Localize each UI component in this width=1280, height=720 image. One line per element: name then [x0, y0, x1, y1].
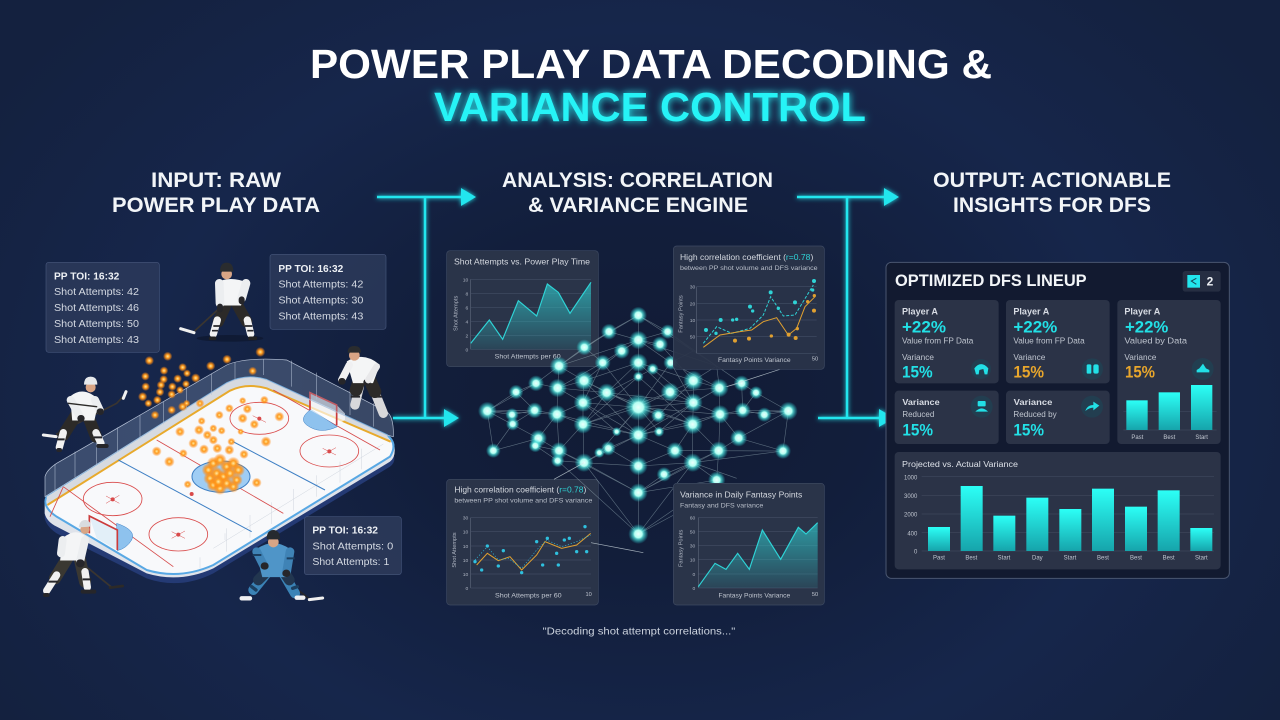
stat card: top right: Shot Attempts: 30 — [278, 296, 364, 307]
mini bars: Past — [1131, 435, 1144, 441]
chart panel: high correlation upper: between PP shot volume and DFS variance — [680, 265, 818, 272]
title: POWER PLAY DATA DECODING & — [310, 41, 992, 87]
card: player 1: +22% — [902, 317, 946, 336]
title — [310, 41, 992, 130]
player: bottom left — [45, 520, 123, 595]
icon — [971, 359, 991, 379]
player: bottom centre — [242, 530, 323, 600]
bar chart: projected vs actual variance: 0 — [914, 549, 918, 555]
heading: analysis: ANALYSIS: CORRELATION — [502, 169, 773, 192]
stat card: bottom right: Shot Attempts: 0 — [312, 541, 394, 552]
badge — [1183, 271, 1221, 292]
goal crease left — [117, 523, 133, 551]
bar chart: projected vs actual variance — [895, 452, 1221, 569]
chart panel: high correlation lower: High correlation coefficient (r=0.78) — [454, 485, 587, 495]
neural network — [478, 307, 798, 553]
card: player 1: Value from FP Data — [902, 336, 974, 346]
output dashboard — [886, 262, 1229, 578]
chart panel: variance in daily fantasy points: 0 — [693, 572, 696, 578]
stat card: top left: Shot Attempts: 43 — [54, 335, 139, 346]
badge: 2 — [1207, 275, 1214, 289]
chart panel: high correlation lower: 10 — [463, 530, 469, 536]
chart panel: shot attempts vs power play time: 0 — [466, 347, 469, 353]
stat card: bottom right: Shot Attempts: 1 — [312, 557, 390, 568]
rink markings — [50, 390, 380, 567]
card: player 2: Value from FP Data — [1013, 336, 1085, 346]
bar chart: projected vs actual variance: Past — [933, 556, 945, 562]
card: variance reduced 1: 15% — [902, 420, 933, 439]
bar chart: projected vs actual variance: 3000 — [904, 494, 918, 500]
stat card: top right: Shot Attempts: 42 — [278, 280, 364, 291]
bar chart: projected vs actual variance: Best — [965, 556, 978, 562]
player: left — [43, 377, 127, 450]
heading: analysis: & VARIANCE ENGINE — [528, 194, 748, 217]
rink glass — [45, 359, 393, 497]
bar chart: projected vs actual variance: Start — [1064, 556, 1077, 562]
card: player 3 with bars: Player A — [1124, 306, 1161, 316]
chart panel: high correlation lower — [447, 479, 598, 605]
heading: output — [933, 169, 1171, 217]
player: top right — [342, 346, 383, 413]
heading: output: INSIGHTS FOR DFS — [953, 194, 1151, 217]
chart panel: high correlation upper: 50 — [812, 357, 818, 363]
chart panel: variance in daily fantasy points: 50 — [690, 530, 696, 536]
stat card: top right: Shot Attempts: 43 — [278, 312, 364, 323]
chart panel: variance in daily fantasy points: Variance in Daily Fantasy Points — [680, 489, 802, 499]
icon — [1192, 358, 1214, 380]
card: player 2: +22% — [1013, 317, 1058, 336]
card: player 3 with bars: Variance — [1124, 352, 1157, 362]
card: variance reduced 2: Variance — [1014, 397, 1053, 407]
arrow: input to analysis — [377, 188, 476, 427]
stat card: top left: PP TOI: 16:32 — [54, 271, 120, 282]
heading: input: POWER PLAY DATA — [112, 194, 320, 217]
stat card: top left — [46, 262, 159, 352]
analysis engine — [447, 246, 824, 638]
chart panel: shot attempts vs power play time — [447, 251, 598, 367]
card: player 2: Player A — [1013, 306, 1050, 316]
bar chart: projected vs actual variance: Projected vs. Actual Variance — [902, 459, 1018, 469]
chart panel: high correlation upper: 50 — [690, 335, 696, 341]
card: player 3 with bars: +22% — [1125, 317, 1169, 336]
card: variance reduced 1 — [895, 391, 999, 444]
card: player 1: Variance — [902, 352, 934, 362]
chart panel: variance in daily fantasy points — [673, 483, 824, 605]
card: variance reduced 1: Variance — [902, 397, 940, 407]
network nodes — [478, 307, 798, 544]
chart panel: variance in daily fantasy points: 50 — [812, 592, 818, 598]
goal right — [310, 393, 345, 425]
caption: "Decoding shot attempt correlations..." — [543, 627, 736, 638]
card: variance reduced 2 — [1006, 391, 1110, 444]
rink base — [45, 443, 395, 583]
chart panel: high correlation lower: 10 — [463, 572, 469, 578]
chart panel: high correlation upper: 20 — [690, 301, 696, 307]
icon — [1082, 358, 1103, 380]
card: player 1 — [895, 300, 999, 383]
bar chart: projected vs actual variance: Day — [1032, 556, 1043, 562]
stat card: top right — [270, 254, 386, 329]
rink wall band — [47, 377, 391, 505]
mini bars — [1123, 385, 1217, 441]
rink ice — [45, 377, 393, 574]
hockey rink illustration — [43, 254, 401, 600]
mini bars: Best — [1163, 435, 1176, 441]
stat card: top left: Shot Attempts: 42 — [54, 287, 139, 298]
chart panel: high correlation lower: Shot Attempts — [452, 532, 458, 568]
goal crease right — [303, 409, 337, 430]
chart panel: high correlation lower: 10 — [463, 544, 469, 550]
chart panel: shot attempts vs power play time: 8 — [466, 291, 469, 297]
chart panel: high correlation upper: Fantasy Points Variance — [718, 357, 791, 364]
card: player 3 with bars — [1117, 300, 1221, 444]
title: VARIANCE CONTROL — [434, 84, 866, 130]
bar chart: projected vs actual variance: Best — [1130, 556, 1142, 562]
chart panel: shot attempts vs power play time: Shot Attempts — [454, 296, 460, 331]
card: variance reduced 2: 15% — [1013, 420, 1044, 439]
heading: input — [112, 169, 320, 217]
chart panel: variance in daily fantasy points: 0 — [693, 586, 696, 592]
icon — [1081, 396, 1103, 418]
heading: input: INPUT: RAW — [151, 169, 281, 192]
chart panel: high correlation upper: 30 — [690, 285, 696, 291]
chart panel: high correlation lower: 10 — [586, 592, 592, 598]
chart panel: high correlation upper: High correlation coefficient (r=0.78) — [680, 252, 814, 262]
connector lines — [554, 369, 780, 553]
bar chart: projected vs actual variance: 400 — [907, 531, 918, 537]
bar chart: projected vs actual variance: Best — [1163, 556, 1175, 562]
chart panel: shot attempts vs power play time: 2 — [466, 334, 469, 340]
chart panel: high correlation upper — [673, 246, 824, 369]
card: player 2: Variance — [1013, 352, 1046, 362]
dashboard title: OPTIMIZED DFS LINEUP — [895, 271, 1087, 290]
card: player 2: 15% — [1013, 363, 1044, 382]
chart panel: variance in daily fantasy points: 30 — [690, 544, 696, 550]
chart panel: high correlation upper: Fantasy Points — [678, 295, 684, 333]
arrow: analysis to output — [797, 188, 899, 427]
stat card: top right: PP TOI: 16:32 — [278, 264, 344, 275]
stat card: top left: Shot Attempts: 50 — [54, 319, 139, 330]
stat card: bottom right — [304, 517, 401, 575]
bar chart: projected vs actual variance: 1000 — [904, 475, 918, 481]
chart panel: high correlation upper: 10 — [690, 318, 696, 324]
chart panel: high correlation lower: 0 — [466, 586, 469, 592]
chart panel: shot attempts vs power play time: 4 — [466, 320, 469, 326]
chart panel: high correlation lower: Shot Attempts per 60 — [495, 593, 562, 600]
card: player 3 with bars: 15% — [1125, 363, 1155, 382]
near-side boards — [200, 444, 383, 568]
network edges — [487, 315, 788, 534]
card: variance reduced 2: Reduced by — [1013, 409, 1057, 419]
bar chart: projected vs actual variance: Start — [998, 556, 1011, 562]
chart panel: shot attempts vs power play time: 6 — [466, 306, 469, 312]
chart panel: high correlation lower: between PP shot volume and DFS variance — [454, 498, 593, 505]
bar chart: projected vs actual variance: Start — [1195, 556, 1208, 562]
bar chart: projected vs actual variance: Best — [1097, 556, 1109, 562]
chart panel: high correlation lower: 30 — [463, 516, 469, 522]
dashboard frame — [886, 262, 1229, 578]
stat card: top left: Shot Attempts: 46 — [54, 303, 139, 314]
card: player 1: 15% — [902, 363, 933, 382]
kick line — [47, 386, 391, 505]
chart panel: variance in daily fantasy points: Fantasy Points Variance — [718, 593, 791, 600]
goal left — [89, 516, 117, 550]
stat card: bottom right: PP TOI: 16:32 — [312, 526, 378, 537]
card: player 2 — [1006, 300, 1110, 383]
bar chart: projected vs actual variance: 2000 — [904, 513, 918, 519]
card: player 3 with bars: Valued by Data — [1124, 336, 1187, 346]
chart panel: high correlation lower: 10 — [463, 558, 469, 564]
chart panel: variance in daily fantasy points: 60 — [690, 516, 696, 522]
shot attempt dots — [138, 347, 284, 495]
chart panel: shot attempts vs power play time: Shot Attempts vs. Power Play Time — [454, 257, 590, 267]
card: variance reduced 1: Reduced — [902, 409, 935, 419]
chart panel: variance in daily fantasy points: Fantasy and DFS variance — [680, 502, 764, 509]
chart panel: variance in daily fantasy points: Fantasy Points — [678, 529, 684, 567]
chart panel: shot attempts vs power play time: 10 — [463, 277, 469, 283]
heading: analysis — [502, 169, 773, 217]
icon — [971, 396, 993, 418]
chart panel: shot attempts vs power play time: Shot Attempts per 60 — [495, 354, 561, 361]
card: player 1: Player A — [902, 306, 939, 316]
chart panel: variance in daily fantasy points: 10 — [690, 558, 696, 564]
player: top centre — [181, 263, 263, 342]
heading: output: OUTPUT: ACTIONABLE — [933, 169, 1171, 192]
mini bars: Start — [1195, 435, 1208, 441]
